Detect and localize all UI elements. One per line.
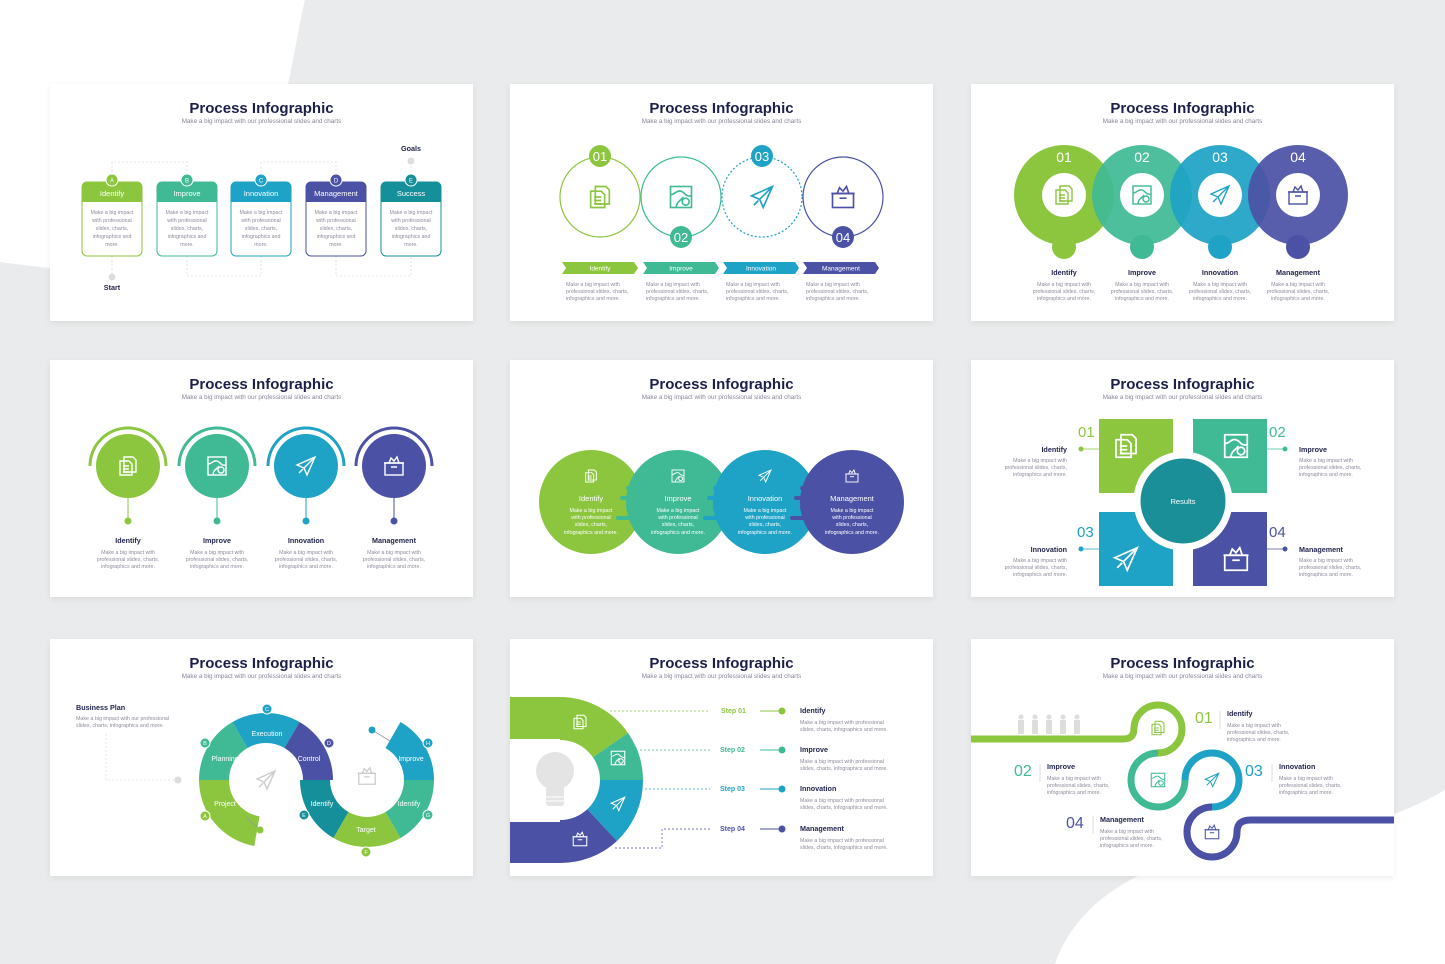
slide 4: arc circles — [50, 360, 473, 597]
descriptions: Make a big impact with — [566, 282, 620, 288]
circles: with professional — [832, 515, 872, 521]
letter badges: C — [265, 707, 269, 713]
descriptions: professional slides, charts, — [1189, 289, 1251, 295]
circles: with professional — [571, 515, 611, 521]
segment labels: Planning — [211, 756, 239, 763]
item 04: 04 — [1066, 815, 1084, 832]
item 02: 02 — [1014, 763, 1032, 780]
step: Innovation — [268, 428, 344, 524]
circles: infographics and more. — [738, 530, 792, 536]
card: Management: slides, charts, — [320, 226, 352, 232]
descriptions: Make a big impact with — [1193, 282, 1247, 288]
step descriptions: Improve — [800, 745, 828, 754]
card: Improve: more. — [180, 242, 194, 248]
card: Improve: infographics and — [168, 234, 206, 240]
circles: Management — [830, 494, 875, 503]
labels: Innovation — [1202, 268, 1238, 277]
descriptions: professional slides, charts, — [186, 557, 248, 563]
circles group — [1014, 145, 1348, 259]
U band shape — [510, 697, 643, 863]
step descriptions: slides, charts, infographics and more. — [800, 845, 888, 851]
subtitle: Make a big impact with our professional slides and charts — [1103, 673, 1262, 680]
descriptions — [97, 550, 425, 570]
step circle 02: 02 — [674, 230, 688, 245]
point: Innovation: infographics and more. — [1013, 572, 1067, 578]
item 02 — [1014, 762, 1109, 796]
descriptions: Make a big impact with — [726, 282, 780, 288]
point: Identify — [1005, 445, 1099, 478]
title: Process Infographic — [189, 655, 334, 672]
point: Innovation: Innovation — [1031, 545, 1067, 554]
step descriptions: Make a big impact with professional — [800, 798, 884, 804]
bulb icon — [536, 752, 574, 806]
step descriptions: slides, charts, infographics and more. — [800, 805, 888, 811]
letter badges — [200, 704, 433, 857]
subtitle: Make a big impact with our professional slides and charts — [182, 394, 341, 401]
step descriptions: Make a big impact with professional — [800, 838, 884, 844]
labels — [115, 536, 417, 545]
card: Management: infographics and — [317, 234, 355, 240]
start marker — [104, 274, 121, 292]
subtitle: Make a big impact with our professional slides and charts — [182, 673, 341, 680]
slide 2: circle chain — [510, 84, 933, 321]
point: Innovation: professional slides, charts, — [1005, 565, 1067, 571]
item 03: infographics and more. — [1279, 790, 1333, 796]
step descriptions: Make a big impact with professional — [800, 759, 884, 765]
step circle 03: 03 — [755, 149, 769, 164]
card: Innovation: slides, charts, — [245, 226, 277, 232]
point: Improve: infographics and more. — [1299, 472, 1353, 478]
step circle 02 — [641, 157, 721, 248]
step descriptions: slides, charts, infographics and more. — [800, 766, 888, 772]
segment labels: Improve — [398, 756, 424, 763]
circles: Make a big impact — [831, 508, 874, 514]
segment labels: Identify — [398, 801, 421, 808]
descriptions — [566, 282, 868, 302]
circles: slides, charts, — [662, 522, 694, 528]
descriptions: Make a big impact with — [1037, 282, 1091, 288]
item 03: professional slides, charts, — [1279, 783, 1341, 789]
card: Identify — [82, 174, 142, 256]
card: Success: slides, charts, — [395, 226, 427, 232]
card: Improve: Make a big impact — [166, 210, 209, 216]
banners: Improve — [669, 266, 693, 272]
card: Innovation — [231, 174, 291, 256]
card: Improve: B — [185, 178, 189, 184]
card: Identify: infographics and — [93, 234, 131, 240]
circles — [539, 450, 904, 554]
card: Success: with professional — [391, 218, 431, 224]
item 01: 01 — [1195, 710, 1213, 727]
card: Identify: Make a big impact — [91, 210, 134, 216]
labels: Improve — [1128, 268, 1156, 277]
circles: with professional — [658, 515, 698, 521]
card: Management: more. — [329, 242, 343, 248]
labels: Innovation — [288, 536, 324, 545]
circles: infographics and more. — [564, 530, 618, 536]
slide 5: big circles — [510, 360, 933, 597]
title: Process Infographic — [649, 100, 794, 117]
item 04: infographics and more. — [1100, 843, 1154, 849]
descriptions: professional slides, charts, — [275, 557, 337, 563]
step: Identify — [90, 428, 166, 524]
descriptions: professional slides, charts, — [363, 557, 425, 563]
descriptions: infographics and more. — [1115, 296, 1169, 302]
business plan text: Business Plan — [76, 703, 125, 712]
labels: Identify — [1051, 268, 1077, 277]
labels: Identify — [115, 536, 141, 545]
start marker: Start — [104, 283, 121, 292]
descriptions: infographics and more. — [101, 564, 155, 570]
road icons — [1151, 721, 1220, 839]
segment labels: Project — [214, 801, 236, 808]
point: Improve — [1267, 445, 1361, 478]
labels: Management — [372, 536, 417, 545]
quadrant squares — [1099, 419, 1267, 586]
step rows — [610, 708, 786, 848]
descriptions: professional slides, charts, — [566, 289, 628, 295]
item 01: Make a big impact with — [1227, 723, 1281, 729]
step circle 04: 04 — [836, 230, 850, 245]
title: Process Infographic — [649, 376, 794, 393]
circles: Improve — [664, 494, 692, 503]
goals marker: Goals — [401, 144, 421, 153]
segment labels: Execution — [252, 731, 282, 738]
segment labels: Control — [298, 756, 321, 763]
card: Identify: with professional — [92, 218, 132, 224]
circles: Make a big impact — [657, 508, 700, 514]
item 04 — [1066, 815, 1162, 849]
connector dots — [246, 726, 390, 834]
numbers: 02 — [1269, 424, 1286, 441]
item 01 — [1195, 709, 1289, 743]
descriptions: professional slides, charts, — [646, 289, 708, 295]
subtitle: Make a big impact with our professional slides and charts — [642, 394, 801, 401]
center results circle — [1137, 455, 1229, 547]
item 01: Identify — [1227, 709, 1253, 718]
card: Success: E — [409, 178, 413, 184]
descriptions: professional slides, charts, — [1033, 289, 1095, 295]
step descriptions: Innovation — [800, 784, 836, 793]
letter badges: B — [203, 741, 207, 747]
point: Improve: Make a big impact with — [1299, 458, 1353, 464]
item 02: Improve — [1047, 762, 1075, 771]
point: Management: Make a big impact with — [1299, 558, 1353, 564]
circles: infographics and more. — [825, 530, 879, 536]
item 04: professional slides, charts, — [1100, 836, 1162, 842]
card: Improve: Improve — [173, 189, 201, 198]
circles group: 03 — [1212, 149, 1228, 165]
step circle 01: 01 — [593, 149, 607, 164]
point: Management: Management — [1299, 545, 1344, 554]
descriptions: infographics and more. — [279, 564, 333, 570]
circles: with professional — [745, 515, 785, 521]
descriptions: Make a big impact with — [1115, 282, 1169, 288]
letter badges: A — [203, 814, 207, 820]
banners — [562, 262, 879, 274]
descriptions: infographics and more. — [806, 296, 860, 302]
item 02: Make a big impact with — [1047, 776, 1101, 782]
item 03: 03 — [1245, 763, 1263, 780]
slide 7: S ring cycle — [50, 639, 473, 876]
point: Identify: professional slides, charts, — [1005, 465, 1067, 471]
people icons — [1018, 714, 1080, 734]
title: Process Infographic — [649, 655, 794, 672]
card: Improve: with professional — [167, 218, 207, 224]
slide 3: overlapping circles — [971, 84, 1394, 321]
step descriptions: Identify — [800, 706, 826, 715]
descriptions: professional slides, charts, — [1111, 289, 1173, 295]
banners: Management — [822, 266, 860, 272]
step rows: Step 01 — [721, 708, 746, 715]
circles: slides, charts, — [749, 522, 781, 528]
descriptions: infographics and more. — [190, 564, 244, 570]
card: Success: Make a big impact — [390, 210, 433, 216]
card: Management: Management — [314, 189, 359, 198]
point: Improve: Improve — [1299, 445, 1327, 454]
circles group: 02 — [1134, 149, 1150, 165]
card: Identify: A — [110, 178, 114, 184]
item 03 — [1245, 762, 1341, 796]
center icons — [257, 768, 376, 789]
goals marker — [401, 144, 421, 164]
labels: Management — [1276, 268, 1321, 277]
title: Process Infographic — [1110, 100, 1255, 117]
step circle 03 — [722, 145, 802, 237]
point: Identify: Identify — [1041, 445, 1067, 454]
card: Improve — [157, 174, 217, 256]
title: Process Infographic — [189, 100, 334, 117]
letter badges: F — [364, 850, 368, 856]
card: Success: Success — [397, 189, 425, 198]
descriptions: infographics and more. — [1037, 296, 1091, 302]
numbers: 04 — [1269, 524, 1286, 541]
letter badges: D — [327, 741, 331, 747]
descriptions: Make a big impact with — [806, 282, 860, 288]
labels: Improve — [203, 536, 231, 545]
descriptions: infographics and more. — [726, 296, 780, 302]
slide 6: quadrant — [971, 360, 1394, 597]
banners: Innovation — [746, 266, 776, 272]
subtitle: Make a big impact with our professional slides and charts — [1103, 394, 1262, 401]
title: Process Infographic — [1110, 376, 1255, 393]
point: Management: professional slides, charts, — [1299, 565, 1361, 571]
letter badges: E — [302, 813, 306, 819]
circles: Make a big impact — [570, 508, 613, 514]
banners: Identify — [590, 266, 611, 272]
circles: slides, charts, — [836, 522, 868, 528]
item 02: professional slides, charts, — [1047, 783, 1109, 789]
descriptions: infographics and more. — [1271, 296, 1325, 302]
descriptions: infographics and more. — [367, 564, 421, 570]
step: Improve — [179, 428, 255, 524]
card: Management — [306, 174, 366, 256]
card: Management: Make a big impact — [315, 210, 358, 216]
step circle 01 — [560, 145, 640, 237]
item 04: Management — [1100, 815, 1145, 824]
letter badges: G — [426, 813, 430, 819]
slide 1: card process — [50, 84, 473, 321]
numbers — [1077, 424, 1286, 541]
segment labels: Target — [356, 827, 376, 834]
step rows: Step 03 — [720, 786, 745, 793]
descriptions: Make a big impact with — [646, 282, 700, 288]
business plan text: Make a big impact with our professional — [76, 716, 169, 722]
descriptions: professional slides, charts, — [726, 289, 788, 295]
title: Process Infographic — [189, 376, 334, 393]
title: Process Infographic — [1110, 655, 1255, 672]
ring segments — [214, 728, 419, 832]
labels — [1051, 268, 1321, 277]
connectors — [112, 161, 411, 277]
step descriptions — [800, 706, 888, 851]
letter badges: H — [426, 741, 430, 747]
card: Management: D — [334, 178, 339, 184]
point: Management: infographics and more. — [1299, 572, 1353, 578]
item 02: infographics and more. — [1047, 790, 1101, 796]
point: Innovation: Make a big impact with — [1013, 558, 1067, 564]
circles: infographics and more. — [651, 530, 705, 536]
business plan text — [76, 703, 182, 784]
item 04: Make a big impact with — [1100, 829, 1154, 835]
point: Identify: Make a big impact with — [1013, 458, 1067, 464]
card: Management: with professional — [316, 218, 356, 224]
descriptions: Make a big impact with — [190, 550, 244, 556]
step rows: Step 04 — [720, 826, 745, 833]
descriptions: professional slides, charts, — [806, 289, 868, 295]
descriptions: infographics and more. — [1193, 296, 1247, 302]
card: Innovation: Make a big impact — [240, 210, 283, 216]
descriptions: professional slides, charts, — [97, 557, 159, 563]
card: Innovation: Innovation — [244, 189, 278, 198]
center results circle: Results — [1170, 497, 1196, 506]
slide 8: U band steps — [510, 639, 933, 876]
card: Identify: Identify — [100, 189, 124, 198]
segment labels — [211, 731, 424, 834]
card: Improve: slides, charts, — [171, 226, 203, 232]
card: Innovation: C — [259, 178, 264, 184]
descriptions: Make a big impact with — [367, 550, 421, 556]
card: Identify: more. — [105, 242, 119, 248]
subtitle: Make a big impact with our professional slides and charts — [642, 118, 801, 125]
numbers: 01 — [1078, 424, 1095, 441]
segment labels: Identify — [311, 801, 334, 808]
item 03: Make a big impact with — [1279, 776, 1333, 782]
card: Success: more. — [404, 242, 418, 248]
card: Success: infographics and — [392, 234, 430, 240]
descriptions — [1033, 282, 1329, 302]
step descriptions: Management — [800, 824, 845, 833]
business plan text: slides, charts, infographics and more. — [76, 723, 164, 729]
step circle 04 — [803, 157, 883, 248]
subtitle: Make a big impact with our professional slides and charts — [182, 118, 341, 125]
point: Improve: professional slides, charts, — [1299, 465, 1361, 471]
point: Management — [1267, 545, 1361, 578]
descriptions: professional slides, charts, — [1267, 289, 1329, 295]
subtitle: Make a big impact with our professional slides and charts — [1103, 118, 1262, 125]
descriptions: Make a big impact with — [101, 550, 155, 556]
circles: slides, charts, — [575, 522, 607, 528]
descriptions: infographics and more. — [566, 296, 620, 302]
circles: Make a big impact — [744, 508, 787, 514]
point: Innovation — [1005, 545, 1099, 578]
step rows: Step 02 — [720, 747, 745, 754]
step: Management — [356, 428, 432, 524]
item 03: Innovation — [1279, 762, 1315, 771]
item 01: infographics and more. — [1227, 737, 1281, 743]
step descriptions: Make a big impact with professional — [800, 720, 884, 726]
item 01: professional slides, charts, — [1227, 730, 1289, 736]
card: Identify: slides, charts, — [96, 226, 128, 232]
road path — [971, 705, 1394, 857]
circles group: 04 — [1290, 149, 1306, 165]
card: Innovation: infographics and — [242, 234, 280, 240]
descriptions: Make a big impact with — [1271, 282, 1325, 288]
circles group: 01 — [1056, 149, 1072, 165]
step descriptions: slides, charts, infographics and more. — [800, 727, 888, 733]
slide 9: winding road — [971, 639, 1394, 876]
card: Success — [381, 174, 441, 256]
point: Identify: infographics and more. — [1013, 472, 1067, 478]
card: Innovation: more. — [254, 242, 268, 248]
circles: Innovation — [748, 494, 782, 503]
card: Innovation: with professional — [241, 218, 281, 224]
circles: Identify — [579, 494, 603, 503]
numbers: 03 — [1077, 524, 1094, 541]
descriptions: Make a big impact with — [279, 550, 333, 556]
subtitle: Make a big impact with our professional slides and charts — [642, 673, 801, 680]
descriptions: infographics and more. — [646, 296, 700, 302]
